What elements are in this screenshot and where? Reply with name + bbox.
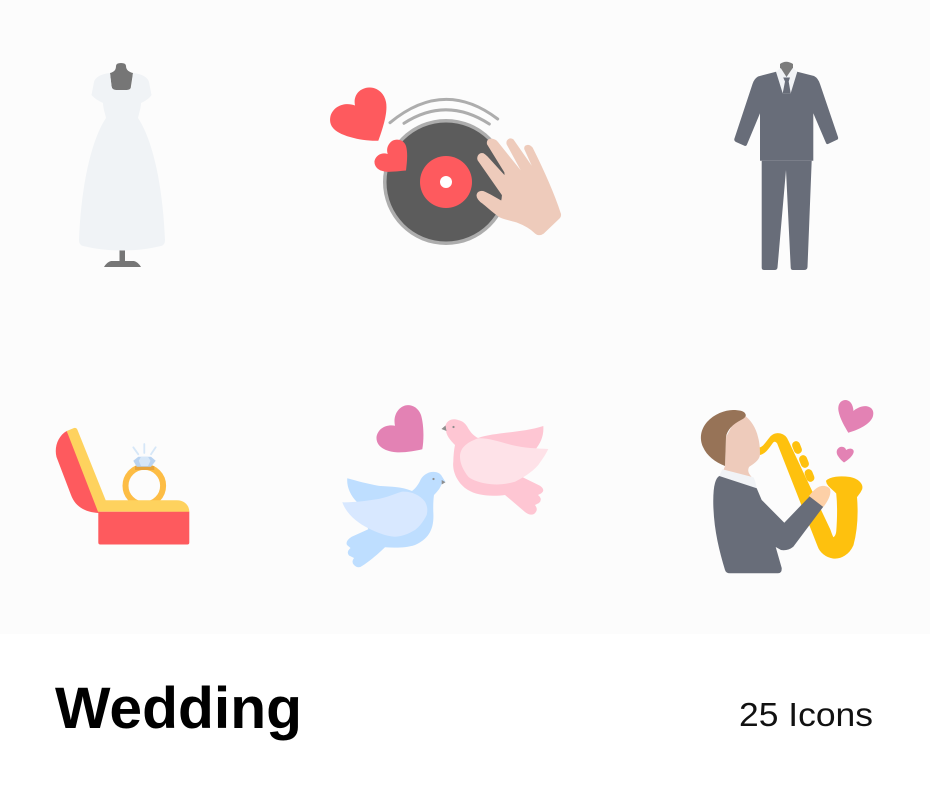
icon: engagement ring in box [56,428,189,544]
heart [376,405,423,452]
record [383,119,509,245]
hand [809,486,830,507]
icon: saxophone player with hearts [701,400,873,573]
box lid [56,431,105,513]
blue dove [347,472,446,567]
hearts [838,400,873,433]
diamond [133,457,156,467]
diamond sparkle rays [133,444,156,454]
blue dove wing [342,492,427,537]
icon: wedding dress on mannequin [79,63,165,267]
heading: Wedding: Wedding [55,676,302,741]
shirt collar [719,469,757,488]
saxophone keys [791,440,803,455]
jacket [713,476,823,573]
icon: groom suit [734,62,838,270]
box base [98,500,189,512]
text: 25 Icons: 25 Icons [739,696,873,733]
hand [477,139,560,234]
small heart [374,140,407,172]
ring band [126,467,163,505]
saxophone [760,434,862,558]
face and neck [722,415,760,481]
sound arcs [390,99,498,123]
hair [701,410,746,466]
icon: two doves with heart [342,405,548,567]
pink dove [442,419,543,515]
pink dove wing [460,438,548,485]
large heart [330,87,386,141]
icon: vinyl record with hand and hearts [330,87,560,245]
